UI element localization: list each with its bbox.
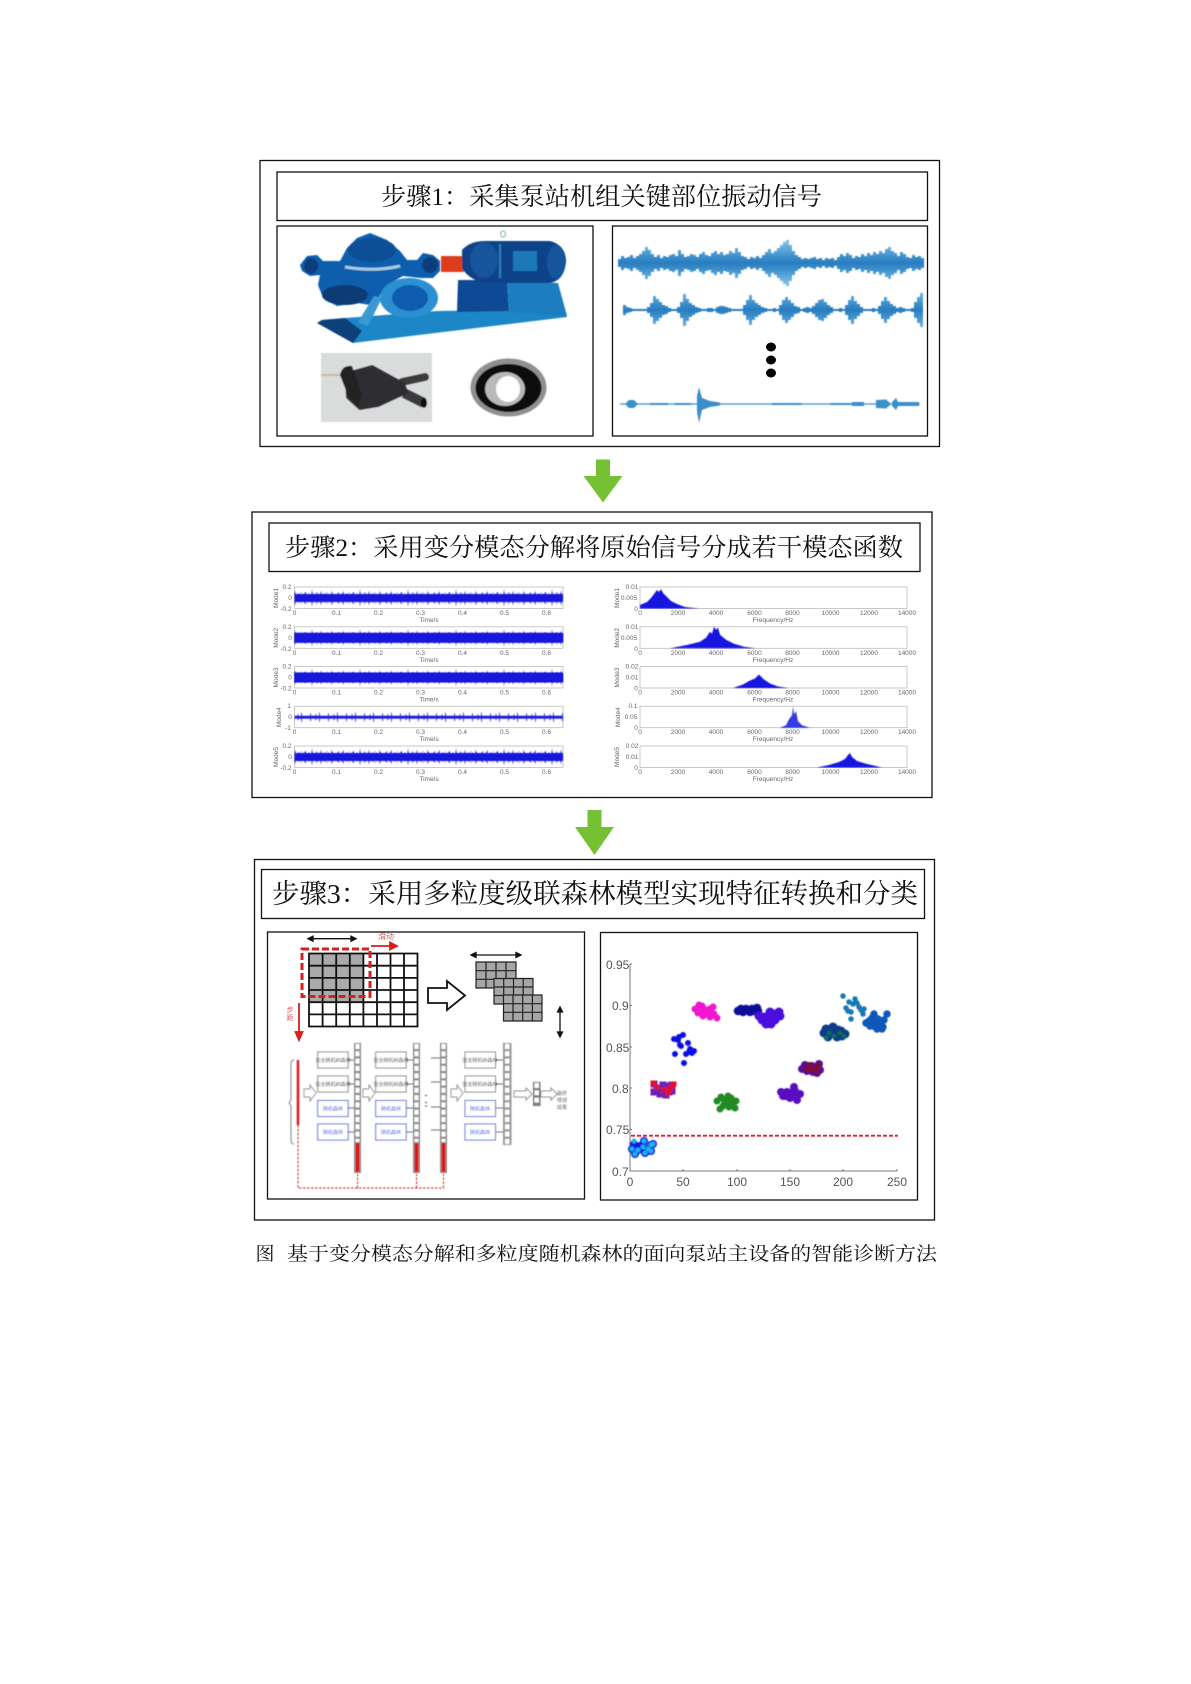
panel: step 2 bbox=[252, 512, 932, 798]
chart: mode 3 spectrum: 12000 bbox=[860, 690, 878, 696]
chart: mode 1 time: 0 bbox=[288, 595, 292, 602]
chart: mode 3 time: Mode3 bbox=[273, 667, 280, 687]
forest boxes: column 3: 随机森林 bbox=[470, 1106, 490, 1112]
chart: mode 1 spectrum: 12000 bbox=[860, 610, 878, 617]
chart: mode 3 spectrum: 0.02 bbox=[626, 664, 639, 670]
chart: mode 4 spectrum: 8000 bbox=[785, 729, 800, 736]
chart: mode 4 spectrum bbox=[615, 703, 916, 743]
chart: vibration waveform 1 bbox=[618, 240, 924, 286]
forest boxes: column 2: 完全随机树森林 bbox=[373, 1057, 409, 1064]
chart: mode 5 time: Mode5 bbox=[273, 747, 280, 767]
chart: mode 1 spectrum: 2000 bbox=[671, 610, 686, 617]
chart: mode 2 time: 0.4 bbox=[458, 650, 467, 657]
chart: mode 2 time bbox=[273, 624, 563, 664]
chart: mode 4 time: 0.1 bbox=[332, 729, 341, 736]
chart: mode 2 spectrum: 2000 bbox=[671, 650, 686, 657]
chart: mode 3 spectrum: 8000 bbox=[785, 690, 800, 696]
forest boxes: column 3: 完全随机树森林 bbox=[462, 1057, 498, 1064]
chart: mode 3 time: 0.1 bbox=[332, 690, 341, 696]
arrow: step 1 to step 2 bbox=[584, 460, 622, 502]
chart: mode 2 time: 0.1 bbox=[332, 650, 341, 657]
chart: mode 1 time: Mode1 bbox=[273, 588, 280, 608]
forest boxes: column 1: 完全随机树森林 bbox=[315, 1081, 351, 1088]
connector arrows bbox=[348, 1058, 503, 1132]
chart: mode 1 time: 0.4 bbox=[458, 610, 467, 617]
chart: mode 4 spectrum: 2000 bbox=[671, 729, 686, 736]
forest boxes: column 1: 完全随机树森林 bbox=[315, 1057, 351, 1064]
chart: mode 1 time: -0.2 bbox=[280, 606, 292, 613]
chart: mode 3 time: 0 bbox=[293, 690, 297, 696]
chart: mode 2 spectrum: 14000 bbox=[898, 650, 916, 657]
base bbox=[317, 309, 567, 343]
axis labels: 250 bbox=[887, 1175, 907, 1189]
output labels: 预测 bbox=[557, 1097, 567, 1104]
chart: mode 1 spectrum: Frequency/Hz bbox=[753, 617, 793, 624]
chart: mode 5 spectrum: 12000 bbox=[860, 769, 878, 776]
axis labels: 150 bbox=[780, 1175, 800, 1189]
chart: mode 1 spectrum: 8000 bbox=[785, 610, 800, 617]
chart: mode 3 time: 0.2 bbox=[374, 690, 383, 696]
chart: mode 4 spectrum: 0 bbox=[638, 729, 642, 736]
chart: mode 4 time: 0 bbox=[293, 729, 297, 736]
heading: step 2 bbox=[269, 523, 920, 572]
axis labels: 0.9 bbox=[612, 999, 629, 1013]
chart: mode 3 spectrum: 0 bbox=[634, 686, 638, 692]
chart: mode 5 spectrum: 4000 bbox=[709, 769, 724, 776]
chart: mode 5 time bbox=[273, 743, 563, 783]
chart: mode 1 time: 0.1 bbox=[332, 610, 341, 617]
chart: mode 4 spectrum: 4000 bbox=[709, 729, 724, 736]
chart: mode 2 spectrum: 10000 bbox=[821, 650, 840, 657]
hook bbox=[500, 231, 506, 237]
coupling bbox=[441, 256, 473, 272]
output labels: 最终 bbox=[557, 1090, 567, 1097]
chart: mode 1 spectrum: 14000 bbox=[898, 610, 916, 617]
heading: step 1 bbox=[277, 172, 928, 220]
chart: mode 3 spectrum: Mode3 bbox=[614, 667, 621, 687]
diagram: extracted feature windows bbox=[471, 952, 562, 1037]
chart: mode 1 time: 0.3 bbox=[416, 610, 425, 617]
chart: mode 3 time: 0.2 bbox=[282, 664, 292, 670]
chart: mode 4 spectrum: 0.05 bbox=[625, 714, 638, 721]
axis labels: 0.8 bbox=[612, 1082, 629, 1096]
cluster: violet hexagons bbox=[759, 1012, 780, 1024]
cluster: maroon diamonds bbox=[802, 1064, 820, 1073]
chart: mode 2 time: 0.2 bbox=[282, 624, 292, 631]
threshold line bbox=[631, 1135, 898, 1137]
chart: mode 3 spectrum: 0 bbox=[638, 690, 642, 696]
chart: mode 5 time: 0.3 bbox=[416, 769, 425, 776]
chart: mode 2 spectrum: Mode2 bbox=[614, 627, 621, 648]
chart: mode 4 spectrum: 10000 bbox=[821, 729, 840, 736]
chart: mode 4 time: -1 bbox=[285, 725, 291, 732]
chart: mode 3 spectrum: 4000 bbox=[709, 690, 724, 696]
axis labels: 100 bbox=[727, 1175, 747, 1189]
chart: mode 1 time bbox=[273, 584, 563, 624]
panel: step 1 bbox=[260, 160, 940, 446]
chart: mode 5 time: 0.4 bbox=[458, 769, 467, 776]
forest boxes: column 2: 随机森林 bbox=[381, 1129, 401, 1136]
chart: mode 2 time: 0 bbox=[288, 635, 292, 642]
chart: mode 2 spectrum: 0 bbox=[638, 650, 642, 657]
chart: vibration waveform 2 bbox=[623, 293, 923, 327]
chart: mode 5 spectrum: 2000 bbox=[671, 769, 686, 776]
diagram: cascade forest bbox=[289, 1043, 567, 1188]
chart: mode 1 spectrum: 0.005 bbox=[621, 595, 638, 602]
chart: mode 5 time: 0 bbox=[288, 754, 292, 761]
axis labels: 0 bbox=[627, 1175, 634, 1189]
chart: mode 1 spectrum: 4000 bbox=[709, 610, 724, 617]
chart: mode 5 time: 0.2 bbox=[282, 743, 292, 750]
output labels: 结果 bbox=[557, 1104, 567, 1111]
chart: mode 4 spectrum: 12000 bbox=[860, 729, 878, 736]
cluster: cyan circles bbox=[632, 1141, 653, 1154]
chart: mode 2 time: Mode2 bbox=[273, 627, 280, 648]
chart: vibration waveform 3 bbox=[620, 387, 920, 423]
chart: mode 2 time: 0 bbox=[293, 650, 297, 657]
cluster: navy circles bbox=[738, 1008, 758, 1012]
chart: mode 2 spectrum bbox=[614, 624, 916, 664]
chart: mode 4 time: 0.5 bbox=[500, 729, 509, 736]
chart: mode 3 spectrum: 0.01 bbox=[626, 674, 639, 682]
chart: mode 4 time: 0 bbox=[288, 714, 292, 721]
support leg bbox=[358, 296, 382, 326]
forest boxes: column 3: 随机森林 bbox=[470, 1129, 490, 1136]
caption: 图 bbox=[256, 1243, 275, 1265]
forest boxes: column 2 bbox=[373, 1052, 409, 1140]
chart: mode 4 spectrum: 0.1 bbox=[628, 703, 638, 710]
chart: mode 5 spectrum: 0.01 bbox=[626, 754, 639, 761]
axis labels: 0.95 bbox=[606, 958, 630, 972]
diagram: sliding window scan: 步 bbox=[286, 1006, 294, 1014]
chart: mode 1 time: 0.2 bbox=[282, 584, 292, 591]
chart: mode 2 time: 0.6 bbox=[542, 650, 551, 657]
motor bbox=[462, 241, 566, 283]
chart: mode 2 spectrum: Frequency/Hz bbox=[753, 657, 793, 664]
chart: mode 3 spectrum: Frequency/Hz bbox=[753, 696, 793, 704]
chart: mode 2 time: -0.2 bbox=[280, 646, 292, 653]
chart: mode 3 time: 0.3 bbox=[416, 690, 425, 696]
chart: mode 4 time: 1 bbox=[287, 703, 291, 710]
charts: time-domain modes bbox=[273, 584, 563, 783]
hollow flow arrows bbox=[304, 1085, 557, 1101]
icon: vibration sensor bbox=[321, 353, 432, 422]
chart: mode 5 spectrum: Frequency/Hz bbox=[753, 776, 793, 783]
chart: mode 1 spectrum: 0 bbox=[638, 610, 642, 617]
forest boxes: column 3: 完全随机树森林 bbox=[462, 1081, 498, 1088]
heading: step 1: 步骤1：采集泵站机组关键部位振动信号 bbox=[381, 183, 822, 211]
chart: mode 5 time: 0 bbox=[293, 769, 297, 776]
chart: mode 2 spectrum: 4000 bbox=[709, 650, 724, 657]
cluster: magenta stars bbox=[695, 1005, 717, 1018]
cluster: purple triangles bbox=[781, 1087, 800, 1100]
chart: mode 5 time: 0.5 bbox=[500, 769, 509, 776]
forest boxes: column 2: 随机森林 bbox=[381, 1106, 401, 1112]
cluster: blue circles bbox=[866, 1014, 887, 1029]
chart: mode 1 time: 0.2 bbox=[374, 610, 383, 617]
cluster: red squares bbox=[654, 1084, 672, 1095]
cluster: sparse teal stars bbox=[843, 996, 864, 1019]
heading: step 2: 步骤2：采用变分模态分解将原始信号分成若干模态函数 bbox=[285, 534, 903, 562]
chart: mode 5 spectrum: 10000 bbox=[821, 769, 840, 776]
pedestal bbox=[457, 280, 509, 312]
chart: mode 4 spectrum: 0 bbox=[634, 725, 638, 732]
forest boxes: column 3 bbox=[462, 1052, 498, 1140]
cluster: teal triangles bbox=[824, 1027, 845, 1037]
charts: frequency-domain modes bbox=[614, 584, 916, 783]
chart: mode 4 spectrum: 14000 bbox=[898, 729, 916, 736]
arrow: step 2 to step 3 bbox=[575, 810, 614, 855]
chart: mode 5 time: Time/s bbox=[419, 776, 439, 783]
axis labels: 200 bbox=[833, 1175, 853, 1189]
axis labels: 50 bbox=[676, 1175, 690, 1189]
chart: mode 2 time: Time/s bbox=[419, 657, 439, 664]
chart: mode 1 spectrum: 6000 bbox=[747, 610, 762, 617]
chart: mode 4 spectrum: Mode4 bbox=[615, 707, 622, 727]
chart: mode 1 time: 0.5 bbox=[500, 610, 509, 617]
casing bbox=[300, 233, 440, 306]
chart: mode 4 spectrum: 6000 bbox=[747, 729, 762, 736]
chart: mode 3 spectrum: 14000 bbox=[898, 690, 916, 696]
chart: mode 1 spectrum: 0 bbox=[634, 606, 638, 613]
chart: mode 4 time: 0.4 bbox=[458, 729, 467, 736]
chart: mode 2 spectrum: 12000 bbox=[860, 650, 878, 657]
cluster: blue crosses bbox=[674, 1035, 694, 1063]
chart: mode 1 spectrum: 0.01 bbox=[626, 584, 639, 591]
flange bbox=[380, 278, 438, 318]
heading: step 3 bbox=[262, 870, 924, 918]
chart: mode 2 spectrum: 0 bbox=[634, 646, 638, 653]
chart: mode 5 time: 0.2 bbox=[374, 769, 383, 776]
chart: mode 5 time: 0.1 bbox=[332, 769, 341, 776]
chart: mode 3 spectrum: 6000 bbox=[747, 690, 762, 696]
chart: mode 1 time: Time/s bbox=[419, 617, 439, 624]
chart: mode 5 time: 0.6 bbox=[542, 769, 551, 776]
chart: mode 4 time: Mode4 bbox=[276, 707, 283, 727]
panel: step 3 bbox=[254, 860, 934, 1220]
chart: mode 4 time: 0.3 bbox=[416, 729, 425, 736]
axis labels: 0.85 bbox=[606, 1041, 630, 1055]
chart: mode 3 time: -0.2 bbox=[280, 686, 292, 692]
forest boxes: column 1: 随机森林 bbox=[323, 1129, 343, 1136]
panel: pump equipment photos bbox=[277, 226, 593, 436]
chart: mode 1 time: 0.6 bbox=[542, 610, 551, 617]
chart: mode 4 time: 0.2 bbox=[374, 729, 383, 736]
axis labels bbox=[606, 958, 907, 1189]
diagram: sliding window scan bbox=[286, 931, 418, 1040]
caption: 基于变分模态分解和多粒度随机森林的面向泵站主设备的智能诊断方法 bbox=[287, 1243, 938, 1265]
cluster: green stars bbox=[717, 1096, 736, 1109]
panel: vibration signals bbox=[612, 226, 928, 436]
forest boxes: column 2: 完全随机树森林 bbox=[373, 1081, 409, 1088]
chart: mode 2 time: 0.5 bbox=[500, 650, 509, 657]
chart: mode 2 spectrum: 0.01 bbox=[626, 624, 639, 631]
axis labels: 0.7 bbox=[612, 1165, 629, 1179]
chart: mode 5 spectrum: Mode5 bbox=[614, 747, 621, 767]
chart: mode 3 time: 0.4 bbox=[458, 690, 467, 696]
chart: mode 4 time bbox=[276, 703, 563, 743]
axis labels: 0.75 bbox=[606, 1123, 630, 1137]
axes bbox=[630, 964, 897, 1171]
chart: mode 3 time: 0 bbox=[288, 674, 292, 682]
chart: mode 1 spectrum: 10000 bbox=[821, 610, 840, 617]
chart: mode 3 spectrum: 2000 bbox=[671, 690, 686, 696]
chart: mode 2 spectrum: 6000 bbox=[747, 650, 762, 657]
icon: ellipsis dots bbox=[766, 342, 776, 378]
chart: mode 5 spectrum: 0.02 bbox=[626, 743, 639, 750]
chart: mode 5 spectrum: 6000 bbox=[747, 769, 762, 776]
forest boxes: column 1 bbox=[315, 1052, 351, 1140]
chart: mode 1 spectrum: Mode1 bbox=[614, 588, 621, 608]
chart: mode 2 time: 0.3 bbox=[416, 650, 425, 657]
chart: mode 1 spectrum bbox=[614, 584, 916, 624]
chart: mode 2 time: 0.2 bbox=[374, 650, 383, 657]
cascade strips bbox=[354, 1043, 540, 1173]
chart: mode 1 time: 0 bbox=[293, 610, 297, 617]
panel: multi-grained cascade forest diagram bbox=[268, 931, 584, 1199]
chart: mode 5 spectrum: 0 bbox=[638, 769, 642, 776]
chart: mode 5 spectrum: 14000 bbox=[898, 769, 916, 776]
chart: mode 5 time: -0.2 bbox=[280, 765, 292, 772]
arrow: hollow transform arrow bbox=[428, 981, 465, 1010]
chart: mode 5 spectrum bbox=[614, 743, 916, 783]
forest boxes: column 1: 随机森林 bbox=[323, 1106, 343, 1112]
diagram: sliding window scan: 滑动 bbox=[378, 931, 394, 941]
icon: bearing bbox=[470, 358, 546, 416]
chart: mode 3 spectrum: 10000 bbox=[821, 690, 840, 696]
chart: mode 4 spectrum: Frequency/Hz bbox=[753, 736, 793, 743]
chart: mode 2 spectrum: 8000 bbox=[785, 650, 800, 657]
chart: mode 3 time: Time/s bbox=[419, 696, 439, 704]
chart: mode 4 time: 0.6 bbox=[542, 729, 551, 736]
icon: pump unit bbox=[300, 231, 567, 343]
diagram: sliding window scan: 距 bbox=[286, 1014, 294, 1022]
chart: mode 5 spectrum: 0 bbox=[634, 765, 638, 772]
chart: mode 3 time bbox=[273, 664, 563, 704]
chart: mode 3 time: 0.5 bbox=[500, 690, 509, 696]
heading: step 3: 步骤3：采用多粒度级联森林模型实现特征转换和分类 bbox=[272, 879, 918, 909]
chart: mode 3 time: 0.6 bbox=[542, 690, 551, 696]
chart: mode 2 spectrum: 0.005 bbox=[621, 635, 638, 642]
scatter clusters bbox=[632, 996, 887, 1154]
chart: mode 4 time: Time/s bbox=[419, 736, 439, 743]
panel: scatter chart bbox=[600, 932, 918, 1200]
chart: mode 3 spectrum bbox=[614, 664, 916, 704]
ellipsis bbox=[425, 1095, 427, 1106]
chart: mode 5 spectrum: 8000 bbox=[785, 769, 800, 776]
